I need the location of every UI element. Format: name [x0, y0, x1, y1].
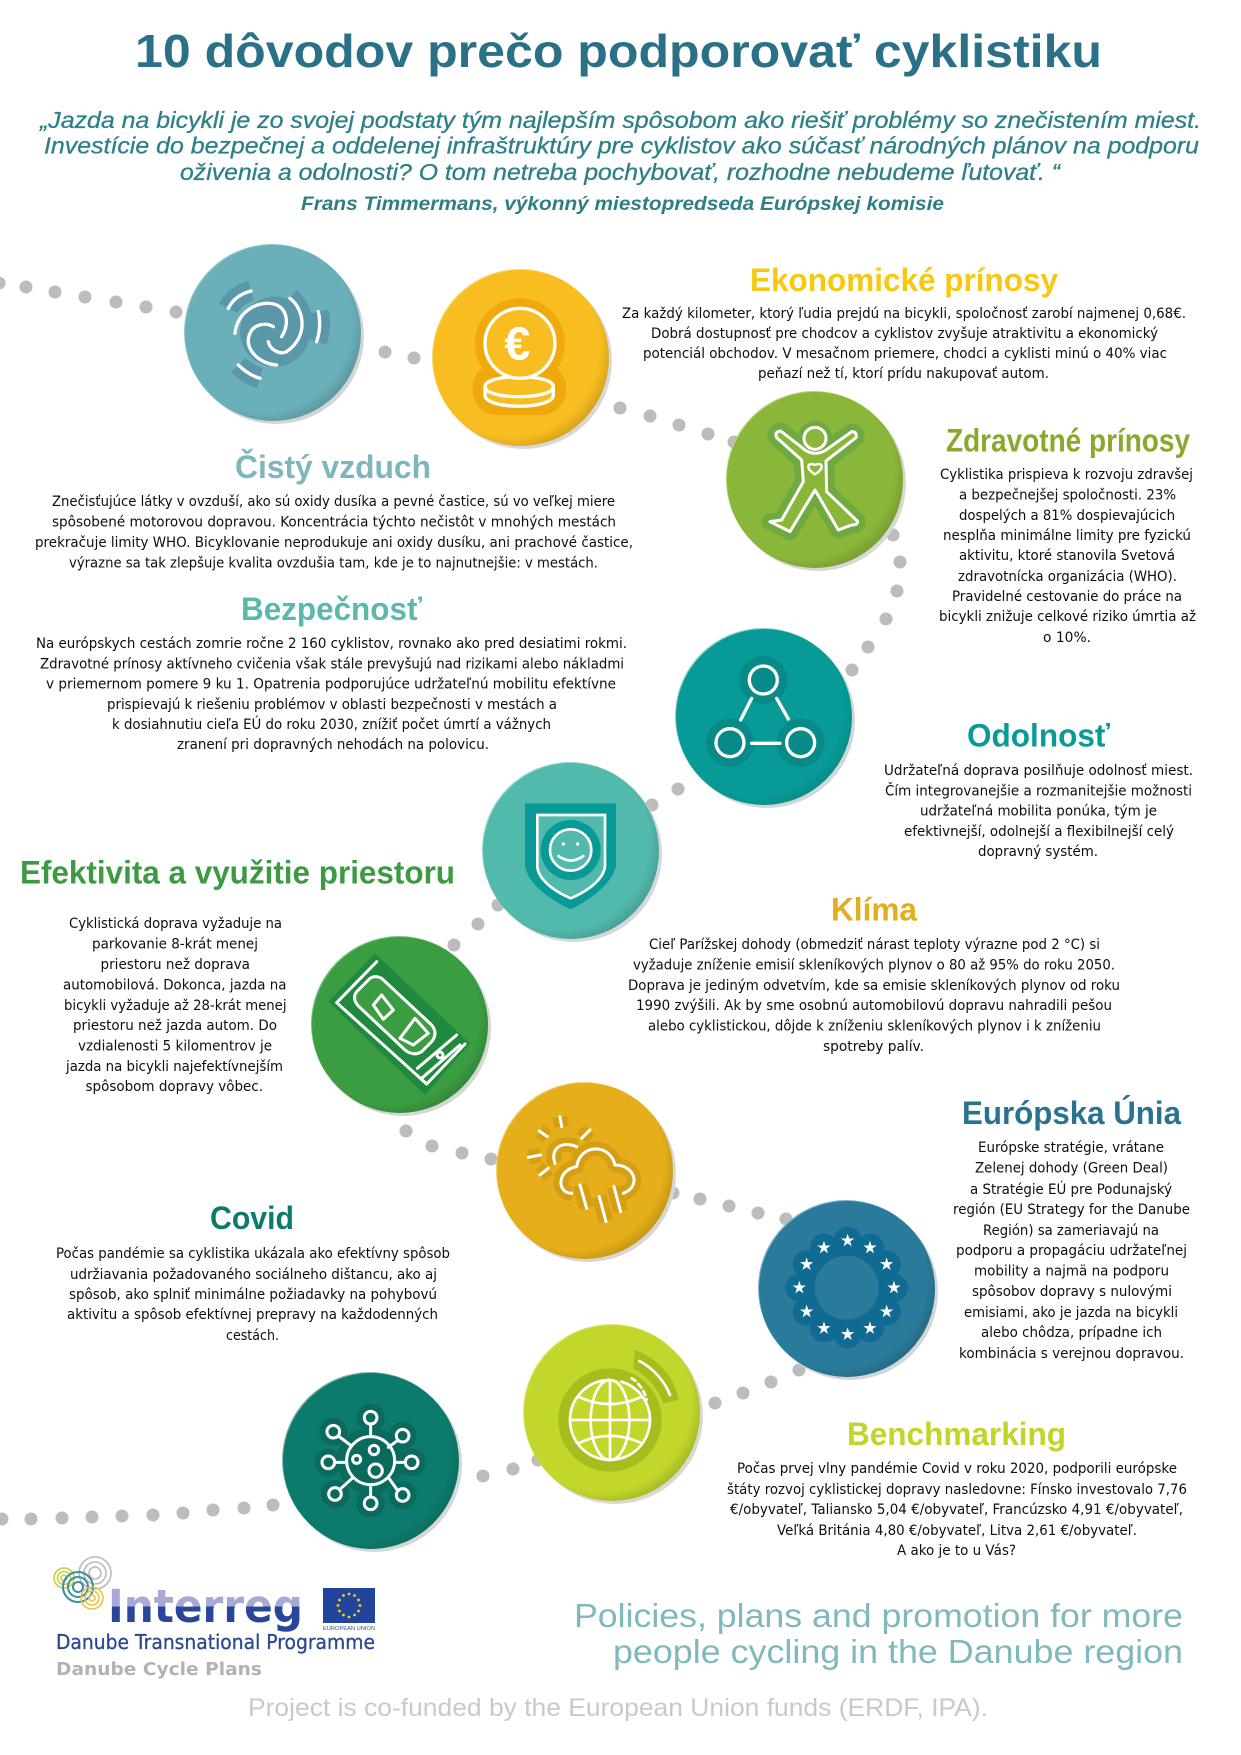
text: resilience: udržateľná mobilita ponúka, tým je [920, 804, 1157, 820]
panel: climate [628, 892, 1120, 1055]
text: economic benefits: Za každý kilometer, ktorý ľudia prejdú na bicykli, spoločnosť zarobí najmenej 0,68€. [622, 306, 1186, 322]
heading: resilience: Odolnosť [967, 718, 1111, 754]
heading: space efficiency: Efektivita a využitie priestoru [20, 854, 455, 890]
slogan: people cycling in the Danube region [613, 1633, 1183, 1670]
text: safety: v priemernom pomere 9 ku 1. Opatrenia podporujúce udržateľnú mobilitu efektívne [46, 676, 616, 692]
panel: resilience [884, 718, 1193, 860]
title: 10 dôvodov prečo podporovať cyklistiku [135, 25, 1102, 77]
text: european union: región (EU Strategy for the Danube [953, 1202, 1190, 1218]
icon: globe with signal [523, 1324, 703, 1504]
quote: oživenia a odolnosti? O tom netreba pochybovať, rozhodne nebudeme ľutovať. “ [180, 159, 1061, 185]
text: economic benefits [622, 306, 1186, 382]
heading: economic benefits: Ekonomické prínosy [750, 262, 1058, 298]
logo: interreg [54, 1557, 375, 1680]
text: economic benefits: potenciál obchodov. V mesačnom priemere, chodci a cyklisti minú o 40% viac [643, 346, 1167, 362]
text: health benefits: nesplňa minimálne limity pre fyzickú [943, 528, 1191, 544]
text: health benefits: dospelých a 81% dospievajúcich [959, 508, 1175, 524]
text: resilience [884, 763, 1193, 860]
icon: car in parking space [311, 936, 491, 1116]
text: economic benefits: peňazí než tí, ktorí prídu nakupovať autom. [758, 366, 1049, 382]
logo rings [54, 1557, 111, 1609]
text: health benefits: bicykli znižuje celkové riziko úmrtia až [939, 609, 1196, 625]
heading: covid: Covid [210, 1200, 294, 1236]
text: safety [36, 636, 627, 753]
text: health benefits: a bezpečnejšej spoločnosti. 23% [959, 488, 1176, 504]
text: space efficiency: priestoru než doprava [100, 957, 250, 973]
logo: interreg: Interreg [108, 1580, 303, 1633]
panel: economic benefits [622, 262, 1186, 382]
text: clean air: Znečisťujúce látky v ovzduší, ako sú oxidy dusíka a pevné častice, sú vo veľkej miere [52, 494, 615, 510]
icon: healthy person [726, 391, 906, 571]
text: health benefits: zdravotnícka organizácia (WHO). [958, 569, 1177, 585]
text: european union: Európske stratégie, vrátane [978, 1140, 1164, 1156]
panel: benchmarking [727, 1416, 1187, 1559]
text: clean air [35, 494, 633, 572]
text: european union: podporu a propagáciu udržateľnej [956, 1243, 1187, 1259]
text: european union: a Stratégie EÚ pre Podunajský [970, 1180, 1172, 1198]
text: climate: alebo cyklistickou, dôjde k zníženiu skleníkových plynov i k zníženiu [648, 1018, 1101, 1034]
text: climate: spotreby palív. [823, 1039, 924, 1055]
heading: clean air: Čistý vzduch [235, 449, 431, 485]
text: space efficiency [63, 916, 286, 1095]
text: health benefits [939, 467, 1196, 646]
text: safety: Na európskych cestách zomrie ročne 2 160 cyklistov, rovnako ako pred desiatimi rokmi. [36, 636, 627, 652]
text: european union: kombinácia s verejnou dopravou. [959, 1346, 1184, 1362]
heading: climate: Klíma [831, 892, 917, 928]
heading: european union: Európska Únia [962, 1095, 1181, 1131]
logo: interreg: Danube Transnational Programme [56, 1630, 375, 1654]
text: economic benefits: Dobrá dostupnosť pre chodcov a cyklistov zvyšuje atraktivitu a ekonomický [651, 326, 1158, 342]
panel: clean air [35, 449, 633, 572]
eu flag: EUROPEAN UNION [323, 1626, 375, 1632]
text: covid: spôsob, ako splniť minimálne požiadavky na pohybovú [69, 1287, 437, 1303]
text: climate: Cieľ Parížskej dohody (obmedziť nárast teploty výrazne pod 2 °C) si [649, 937, 1100, 953]
dotted route [0, 276, 906, 1526]
text: resilience: Čím integrovanejšie a rozmanitejšie možnosti [885, 782, 1192, 800]
text: clean air: prekračuje limity WHO. Bicyklovanie neprodukuje ani oxidy dusíku, ani prachové častice, [35, 535, 633, 551]
icon: clean air swirl [184, 244, 364, 424]
text: safety: k dosiahnutiu cieľa EÚ do roku 2030, znížiť počet úmrtí a vážnych [112, 715, 551, 733]
icon: euro coins: € [504, 317, 530, 369]
icon: safety shield [482, 762, 662, 942]
text: climate: 1990 zvýšili. Ak by sme osobnú automobilovú dopravu nahradili pešou [636, 998, 1112, 1014]
text: space efficiency: automobilová. Dokonca, jazda na [63, 978, 286, 994]
text: european union: Zelenej dohody (Green Deal) [975, 1160, 1168, 1176]
text: space efficiency: bicykli vyžaduje až 28-krát menej [64, 998, 286, 1014]
text: space efficiency: Cyklistická doprava vyžaduje na [69, 916, 282, 932]
text: european union: emisiami, ako je jazda na bicykli [964, 1305, 1178, 1321]
text: european union: spôsobov dopravy s nulovými [972, 1284, 1172, 1300]
funding note: Project is co-funded by the European Union funds (ERDF, IPA). [248, 1694, 988, 1722]
text: covid: Počas pandémie sa cyklistika ukázala ako efektívny spôsob [56, 1246, 450, 1262]
panel: space efficiency [20, 854, 455, 1095]
text: resilience: dopravný systém. [978, 844, 1098, 860]
logo: interreg: Danube Cycle Plans [56, 1659, 262, 1680]
text: space efficiency: spôsobom dopravy vôbec. [86, 1079, 263, 1095]
text: climate: vyžaduje zníženie emisií skleníkových plynov o 80 až 95% do roku 2050. [633, 958, 1115, 974]
text: european union: mobility a najmä na podporu [974, 1264, 1169, 1280]
text: covid [56, 1246, 450, 1344]
panel: health benefits [939, 422, 1196, 646]
icon: euro coins [432, 269, 612, 449]
text: safety: prispievajú k riešeniu problémov v oblasti bezpečnosti v mestách a [107, 697, 557, 713]
icon: coronavirus [282, 1372, 462, 1552]
text: space efficiency: priestoru než jazda autom. Do [73, 1018, 277, 1034]
text: covid: aktivitu a spôsob efektívnej prepravy na každodenných [67, 1307, 438, 1323]
text: benchmarking: Veľká Británia 4,80 €/obyvateľ, Litva 2,61 €/obyvateľ. [777, 1523, 1137, 1539]
text: health benefits: aktivitu, ktoré stanovila Svetová [959, 548, 1175, 564]
icon: european union stars [758, 1200, 938, 1380]
text: clean air: spôsobené motorovou dopravou. Koncentrácia týchto nečistôt v mnohých mestách [52, 514, 616, 530]
text: safety: Zdravotné prínosy aktívneho cvičenia však stále prevyšujú nad rizikami alebo nákladmi [40, 656, 624, 672]
text: covid: udržiavania požadovaného sociálneho dištancu, ako aj [70, 1267, 437, 1283]
text: space efficiency: parkovanie 8-krát menej [92, 936, 258, 952]
text: space efficiency: vzdialenosti 5 kilomentrov je [78, 1038, 272, 1054]
text: resilience: Udržateľná doprava posilňuje odolnosť miest. [884, 763, 1193, 779]
quote [39, 107, 1201, 185]
text: climate [628, 937, 1120, 1055]
text: climate: Doprava je jediným odvetvím, kde sa emisie skleníkových plynov od roku [628, 978, 1120, 994]
text: benchmarking: €/obyvateľ, Taliansko 5,04 €/obyvateľ, Francúzsko 4,91 €/obyvateľ, [730, 1502, 1183, 1518]
text: european union: alebo chôdza, prípadne ich [981, 1325, 1162, 1341]
quote attribution: Frans Timmermans, výkonný miestopredseda Európskej komisie [301, 193, 944, 215]
text: benchmarking: Počas prvej vlny pandémie Covid v roku 2020, podporili európske [737, 1461, 1177, 1477]
quote: Investície do bezpečnej a oddelenej infraštruktúry pre cyklistov ako súčasť národných plánov na podporu [44, 132, 1199, 158]
panel: safety [36, 591, 627, 753]
text: space efficiency: jazda na bicykli najefektívnejším [65, 1059, 283, 1075]
text: clean air: výrazne sa tak zlepšuje kvalita ovzdušia tam, kde je to najnutnejšie: v mestách. [69, 556, 598, 572]
icon: resilience network [675, 628, 855, 808]
text: health benefits: Pravidelné cestovanie do práce na [952, 589, 1182, 605]
text: health benefits: o 10%. [1043, 630, 1091, 646]
text: covid: cestách. [226, 1328, 279, 1344]
text: resilience: efektivnejší, odolnejší a flexibilnejší celý [904, 824, 1174, 840]
quote: „Jazda na bicykli je zo svojej podstaty tým najlepším spôsobom ako riešiť problémy so znečistením miest. [39, 107, 1201, 133]
text: health benefits: Cyklistika prispieva k rozvoju zdravšej [940, 467, 1193, 483]
text: safety: zranení pri dopravných nehodách na polovicu. [177, 737, 489, 753]
text: european union [953, 1140, 1190, 1362]
text: benchmarking: štáty rozvoj cyklistickej dopravy nasledovne: Fínsko investovalo 7,76 [727, 1482, 1187, 1498]
text: benchmarking [727, 1461, 1187, 1559]
text: benchmarking: A ako je to u Vás? [897, 1543, 1016, 1559]
heading: health benefits: Zdravotné prínosy [946, 422, 1190, 458]
panel: covid [56, 1200, 450, 1344]
panel: european union [953, 1095, 1190, 1362]
slogan [574, 1597, 1183, 1670]
slogan: Policies, plans and promotion for more [574, 1597, 1183, 1634]
eu flag [323, 1588, 375, 1632]
heading: benchmarking: Benchmarking [847, 1416, 1066, 1452]
heading: safety: Bezpečnosť [241, 591, 423, 627]
text: european union: Región) sa zameriavajú na [983, 1223, 1159, 1239]
icon: sun and rain cloud [496, 1082, 676, 1262]
